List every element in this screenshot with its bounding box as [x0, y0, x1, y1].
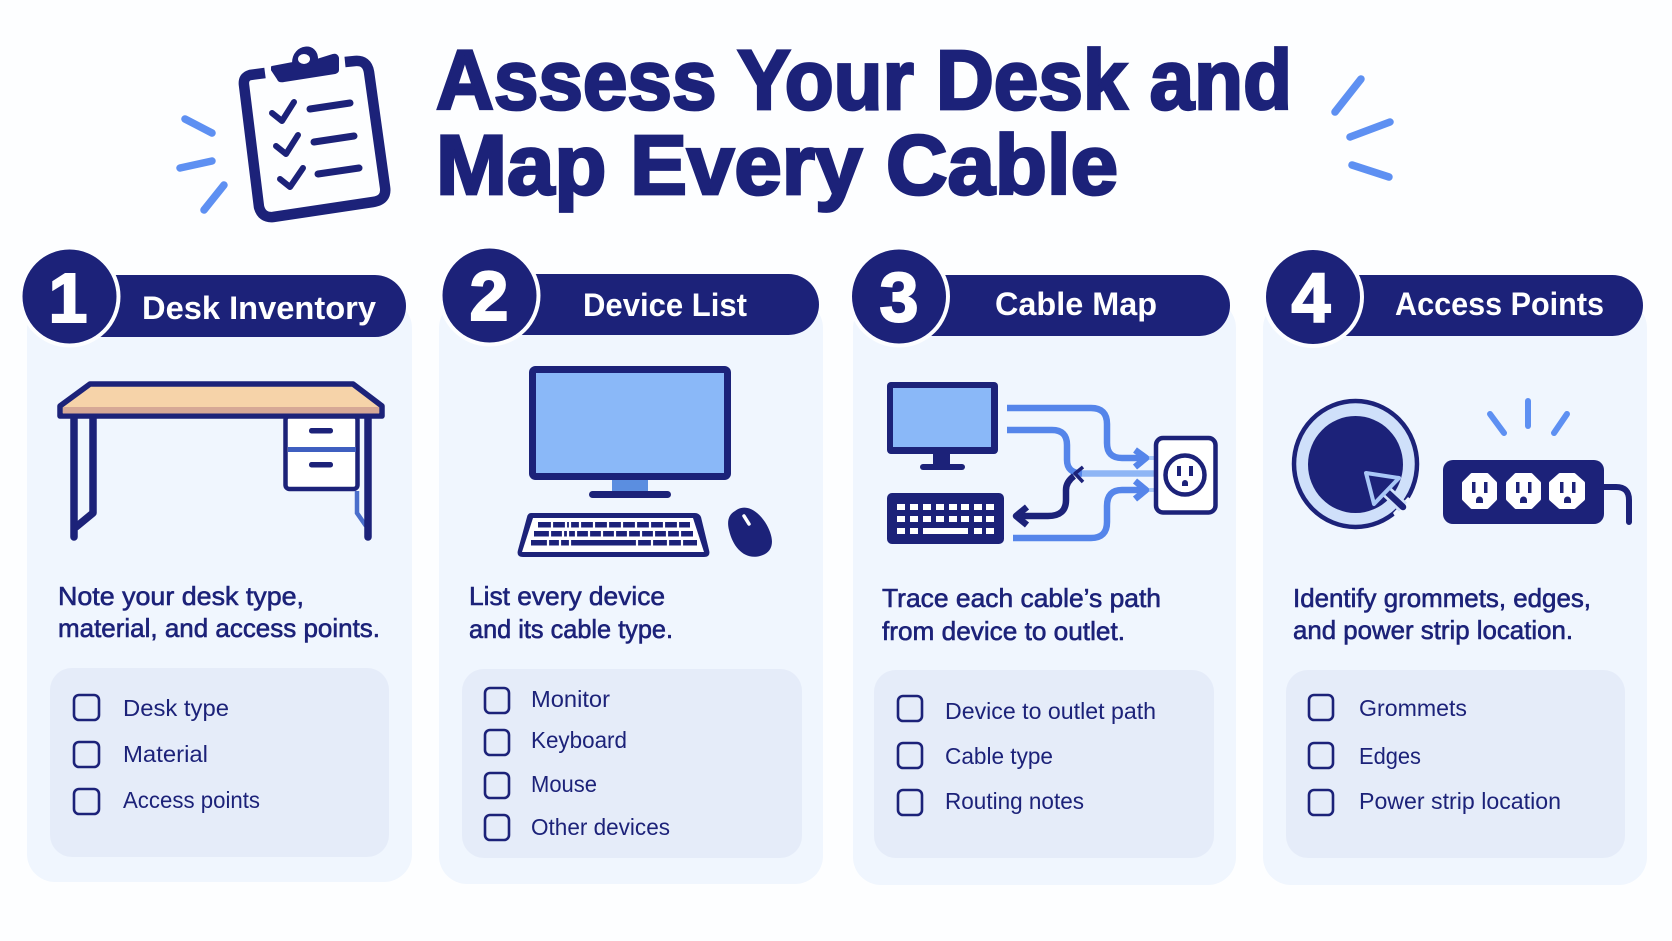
icon: clipboard checklist: [244, 48, 385, 217]
header pill: [899, 275, 1230, 336]
number badge: [438, 244, 540, 346]
checklist: Edges: [1359, 743, 1421, 769]
number badge: [18, 246, 120, 348]
card background: [853, 300, 1236, 885]
cable arrows: [1007, 408, 1155, 538]
heading: Assess Your Desk and: [436, 33, 1292, 127]
description: and its cable type.: [469, 614, 673, 644]
number badge: [1262, 246, 1364, 348]
icon: grommet with cursor: [1294, 401, 1424, 531]
header pill: [490, 274, 819, 335]
panel: cable map: [848, 246, 1236, 885]
number badge: [848, 246, 950, 348]
description: List every device: [469, 581, 665, 611]
header pill: [1313, 275, 1643, 336]
pill title: Cable Map: [995, 286, 1157, 322]
icon: power strip: [1443, 460, 1629, 524]
checklist: Device to outlet path: [945, 698, 1156, 724]
heading: Map Every Cable: [436, 118, 1118, 212]
pill title: Desk Inventory: [142, 290, 376, 326]
icon: right sparks: [1335, 79, 1390, 177]
checklist: Routing notes: [945, 788, 1084, 814]
icon: desktop computer: [518, 370, 772, 557]
description: Trace each cable’s path: [882, 583, 1161, 613]
checklist: [50, 668, 389, 857]
checklist: [1286, 670, 1625, 858]
icon: desk: [60, 384, 382, 537]
checklist: Monitor: [531, 686, 610, 712]
number badge: 3: [880, 258, 918, 336]
description: Identify grommets, edges,: [1293, 583, 1591, 613]
description: and power strip location.: [1293, 615, 1573, 645]
number badge: 2: [470, 257, 508, 335]
checklist: Cable type: [945, 743, 1053, 769]
checklist: [874, 670, 1214, 858]
description: [469, 581, 673, 644]
checklist: Power strip location: [1359, 788, 1561, 814]
checklist: Grommets: [1359, 695, 1467, 721]
description: Note your desk type,: [58, 581, 304, 611]
description: [1293, 583, 1591, 645]
number badge: 1: [49, 259, 87, 337]
icon: left sparks: [180, 119, 224, 210]
checklist: Access points: [123, 787, 260, 813]
description: material, and access points.: [58, 613, 380, 643]
card background: [439, 300, 823, 884]
pill title: Access Points: [1395, 286, 1604, 322]
icon: keyboard: [887, 493, 1004, 544]
panel: desk inventory: [18, 246, 412, 882]
description: [58, 581, 380, 643]
description: from device to outlet.: [882, 616, 1125, 646]
pill title: Device List: [583, 287, 747, 323]
panel: access points: [1262, 246, 1647, 885]
description: [882, 583, 1161, 646]
header pill: [70, 275, 406, 337]
checklist: Material: [123, 741, 208, 767]
icon: monitor: [887, 382, 998, 470]
checklist: [462, 669, 802, 858]
header: [180, 33, 1390, 217]
heading: [436, 33, 1292, 212]
number badge: 4: [1292, 259, 1331, 337]
panel: device list: [438, 244, 823, 884]
card background: [1263, 300, 1647, 885]
card background: [27, 300, 412, 882]
checklist: Mouse: [531, 771, 597, 797]
icon: wall outlet: [1156, 438, 1216, 512]
icon: sparks: [1490, 401, 1567, 433]
checklist: Other devices: [531, 814, 670, 840]
checklist: Keyboard: [531, 727, 627, 753]
checklist: Desk type: [123, 695, 229, 721]
